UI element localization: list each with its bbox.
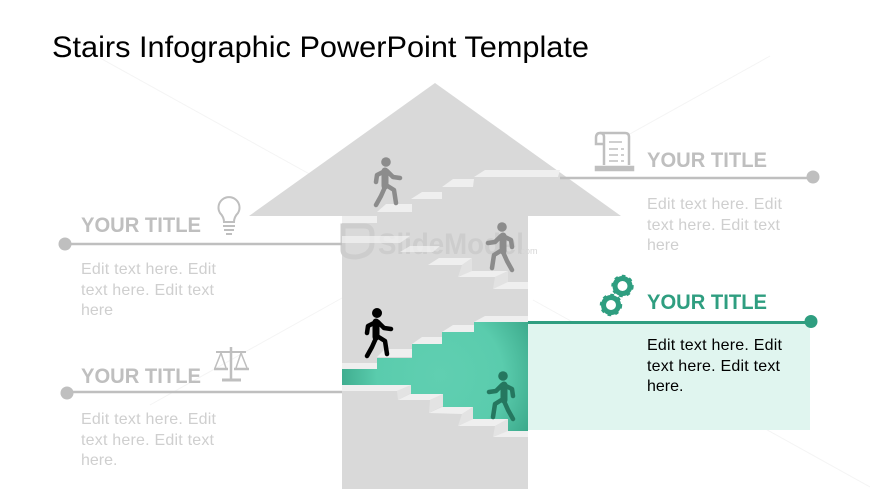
icon: gears	[602, 276, 632, 314]
upper stair steps	[342, 170, 560, 289]
text block: Edit text here. Edit	[647, 196, 783, 213]
connector line and dot	[65, 243, 342, 245]
text block: here	[647, 237, 679, 254]
walker: second gray	[488, 222, 512, 270]
text block: text here. Edit text	[647, 217, 781, 234]
walker: top gray	[376, 157, 400, 205]
teal highlighted stair section	[342, 322, 528, 431]
lower stair steps	[342, 316, 528, 437]
text block: Edit text here. Edit	[81, 411, 217, 428]
panel: lower left step	[60, 347, 342, 469]
icon: scales	[214, 347, 249, 380]
icon: light bulb	[218, 197, 240, 234]
arrow with staircase	[249, 83, 621, 489]
connector line and dot	[67, 391, 342, 393]
text block: Edit text here. Edit	[81, 261, 217, 278]
text block: here	[81, 302, 113, 319]
panel: top right step	[560, 133, 820, 254]
connector line and dot	[560, 177, 813, 179]
highlight background	[528, 323, 810, 430]
panel: highlighted step 3	[528, 276, 818, 430]
text block: text here. Edit text	[81, 282, 215, 299]
heading: YOUR TITLE	[647, 149, 767, 172]
panel: upper left step	[58, 197, 342, 319]
arrow shape	[249, 83, 621, 489]
text block: text here. Edit text	[647, 358, 781, 375]
heading: YOUR TITLE	[647, 291, 767, 314]
heading: YOUR TITLE	[81, 214, 201, 237]
icon: scroll	[596, 133, 633, 170]
walker: black	[367, 308, 391, 356]
walker: dark teal	[489, 371, 513, 419]
text block: text here. Edit text	[81, 432, 215, 449]
connector line and dot	[528, 321, 811, 324]
text block: here.	[81, 452, 117, 469]
heading: YOUR TITLE	[81, 365, 201, 388]
title: Stairs Infographic PowerPoint Template	[52, 31, 589, 64]
watermark: SlideModel	[378, 228, 524, 261]
text block: here.	[647, 378, 683, 395]
text block: Edit text here. Edit	[647, 337, 783, 354]
watermark: .com	[518, 246, 538, 256]
